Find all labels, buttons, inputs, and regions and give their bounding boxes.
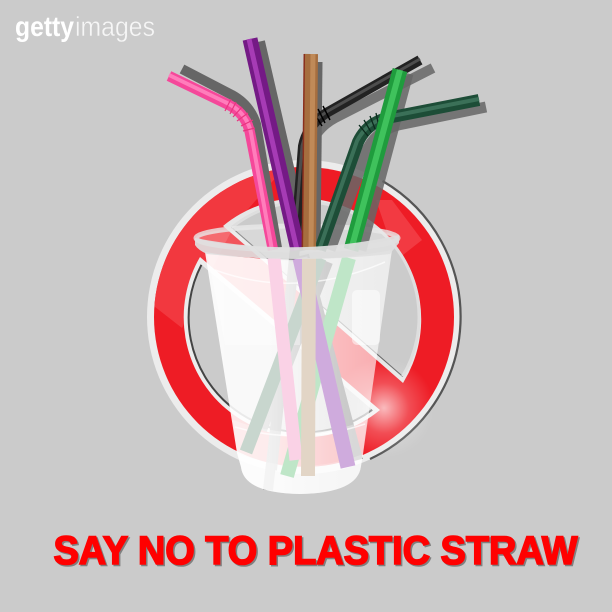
- watermark logo: [15, 11, 155, 42]
- lower-left sector: [184, 257, 380, 437]
- sign outer white rim: [147, 160, 461, 474]
- pink straw: [169, 75, 273, 250]
- pink straw through cup: [274, 258, 296, 460]
- cup ridge lines: [215, 262, 385, 436]
- brown straw: [302, 54, 313, 250]
- red gleam: [334, 358, 434, 458]
- sign dark edge: [370, 181, 461, 459]
- cup lower frosting: [233, 420, 367, 466]
- cup reflection: [352, 290, 380, 345]
- green straw: [351, 70, 400, 250]
- purple straw through cup: [300, 258, 348, 467]
- ring highlight right: [378, 200, 422, 255]
- cup upper-left frosting: [207, 254, 300, 345]
- straw shadows inside cup: [262, 255, 358, 490]
- watermark logo: images: [75, 11, 155, 42]
- black straw inside cup: [272, 248, 295, 470]
- straw shadows: [182, 42, 486, 490]
- cup base: [237, 453, 363, 494]
- cup body: [205, 250, 392, 494]
- ring highlight: [154, 170, 274, 328]
- red ring and bar: [154, 167, 454, 467]
- cup back rim: [196, 226, 398, 250]
- upper-right sector: [223, 198, 421, 383]
- purple straw: [249, 39, 298, 250]
- plastic cup: [205, 250, 392, 494]
- black straw: [272, 59, 420, 470]
- straws seen through the cup: [246, 258, 349, 476]
- headline: SAY NO TO PLASTIC STRAW: [55, 530, 579, 574]
- cup front rim: [195, 235, 399, 259]
- headline: SAY NO TO PLASTIC STRAW: [54, 529, 578, 573]
- dark green straw through cup: [246, 258, 320, 452]
- watermark logo: getty: [15, 11, 74, 42]
- green straw through cup: [287, 258, 349, 476]
- brown straw through cup: [308, 258, 309, 476]
- dark green straw: [319, 99, 479, 250]
- prohibition sign: [140, 140, 461, 474]
